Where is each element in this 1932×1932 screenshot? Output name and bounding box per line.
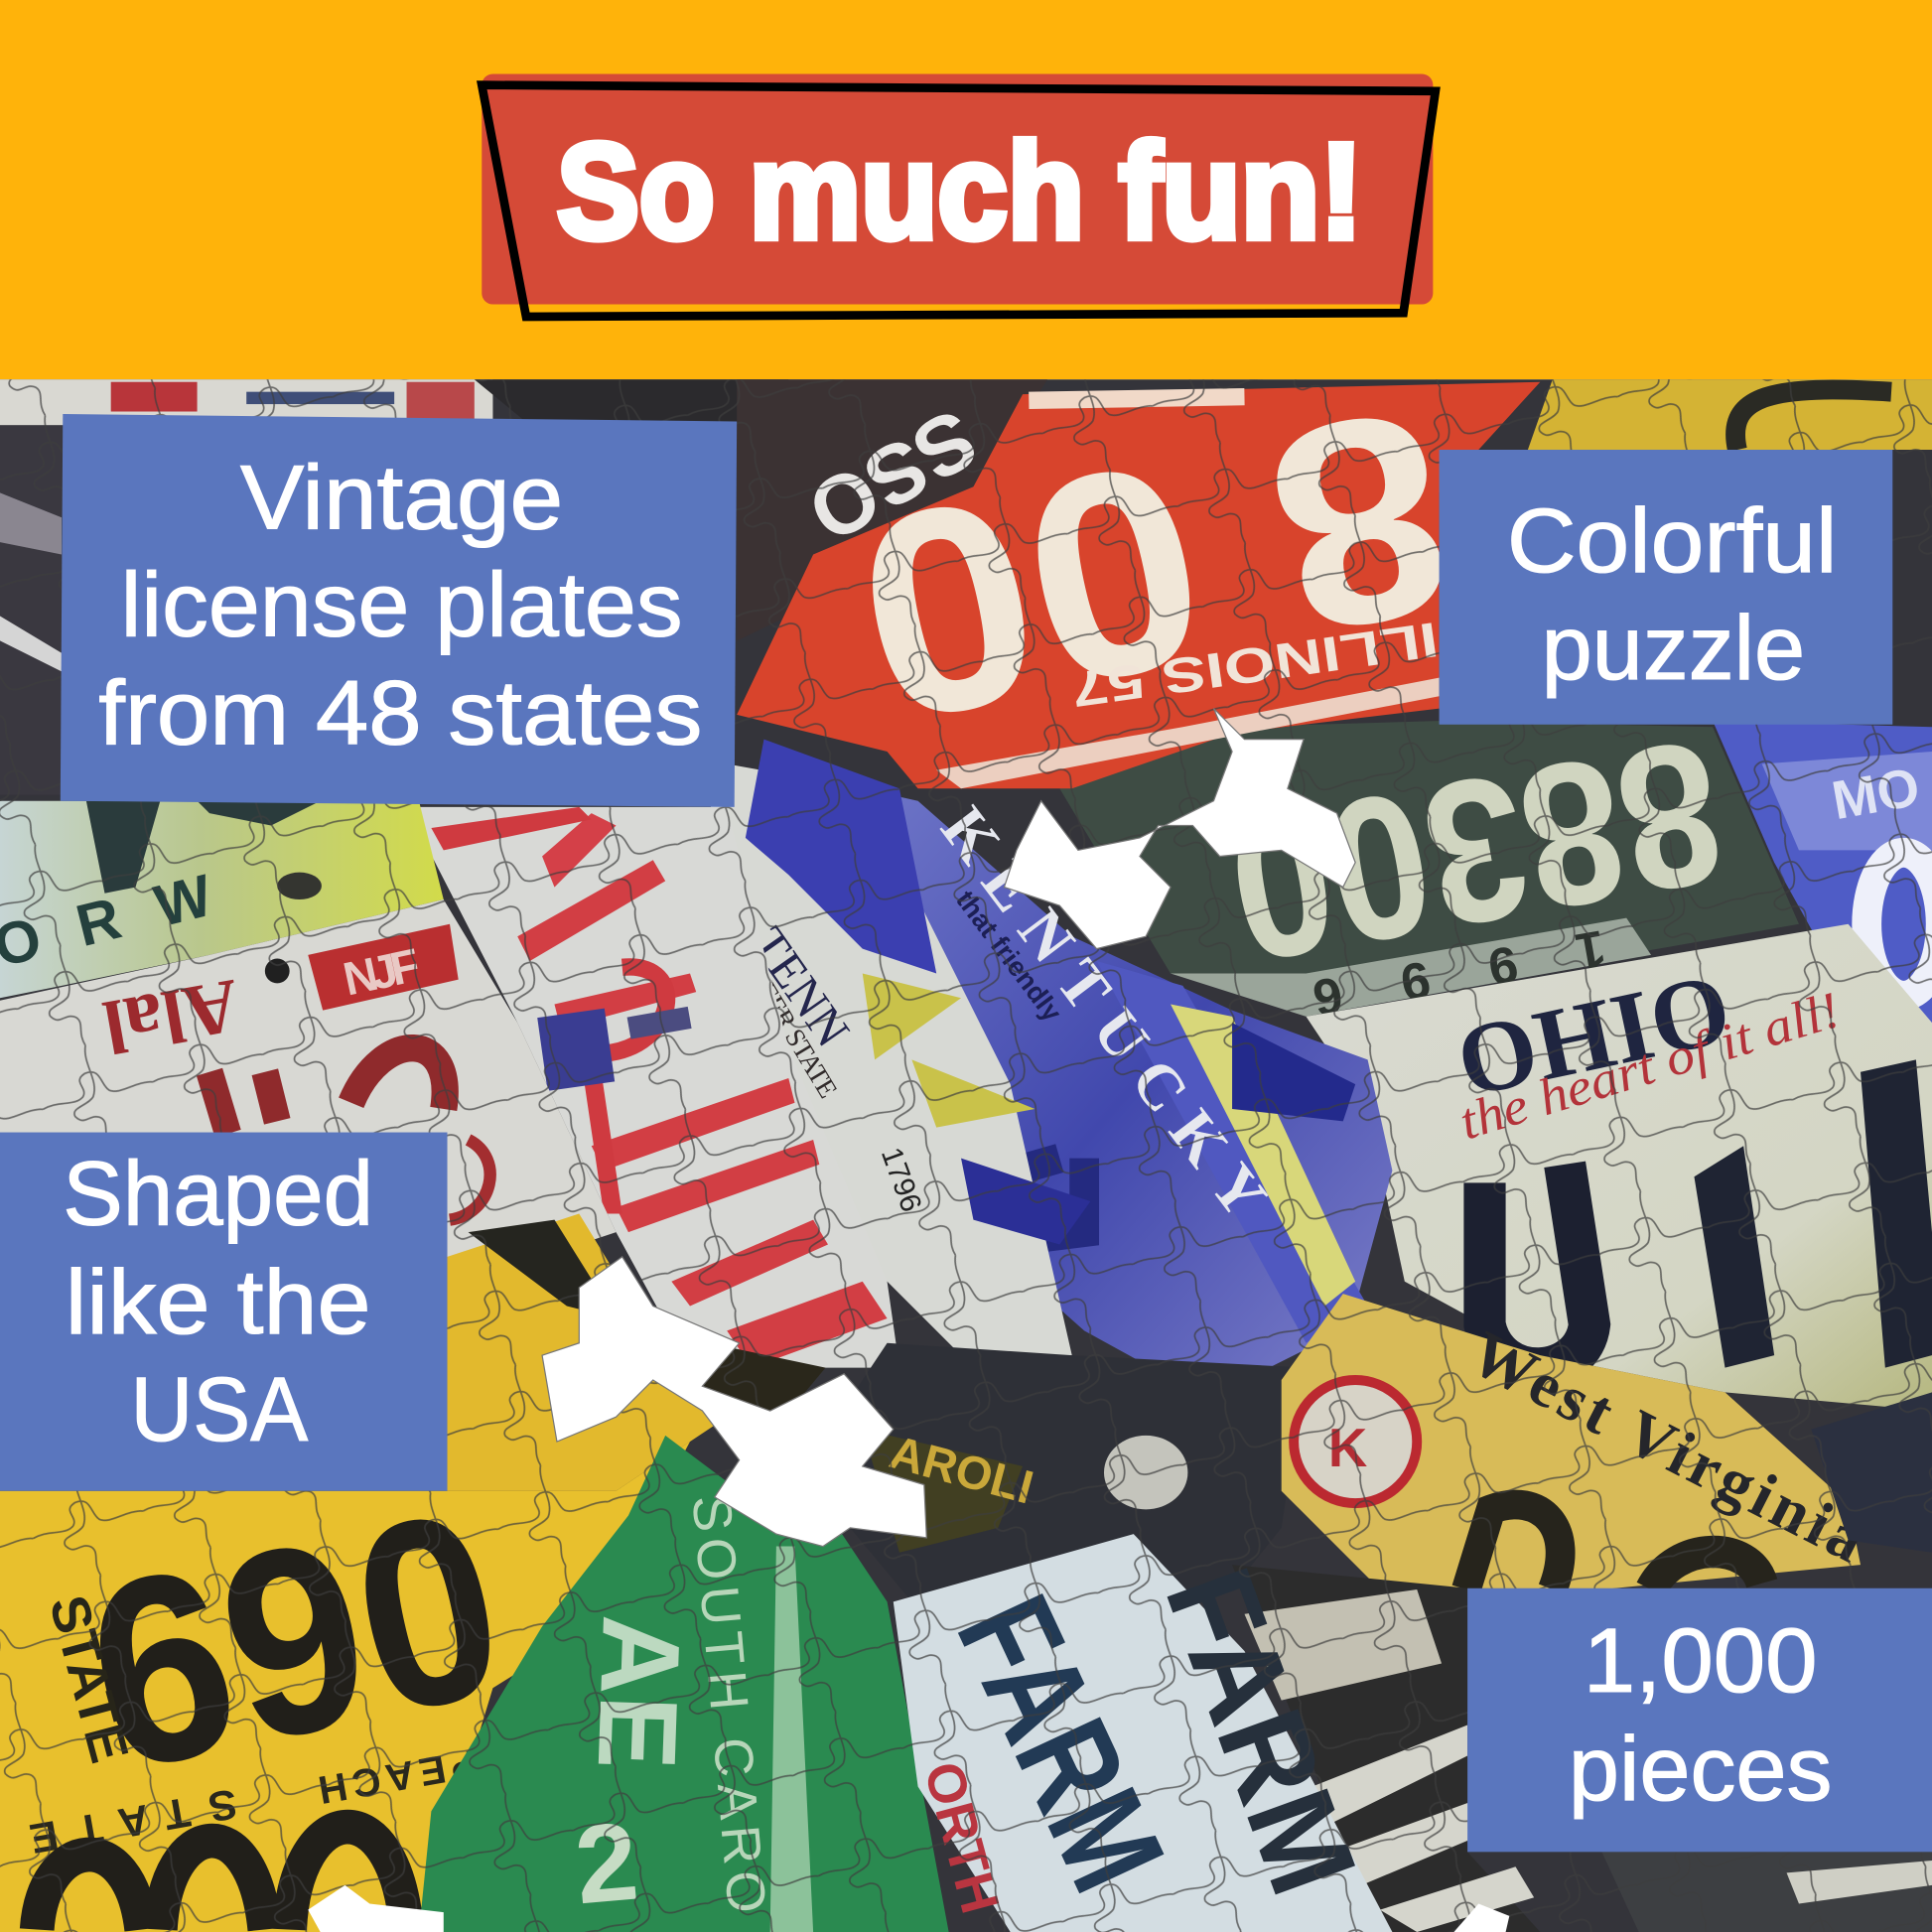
Kentucky plate: that friendly bbox=[950, 885, 1068, 1028]
green plate 1996: 1996 bbox=[1309, 918, 1609, 1027]
red Illinois plate: 8 00 bbox=[832, 346, 1477, 786]
South Carolina green plate: 2 bbox=[571, 1798, 642, 1927]
Farm plate: ORTH bbox=[912, 1755, 1011, 1919]
Ohio plate: OHIO bbox=[1448, 952, 1740, 1119]
lower row of plate digits bbox=[37, 1827, 407, 1930]
callout: shaped like the USA: Shaped bbox=[63, 1144, 373, 1245]
Ohio plate: the heart of it all! bbox=[1453, 982, 1847, 1151]
gap: upper piece pair bbox=[1004, 709, 1355, 949]
right blue plate bbox=[1713, 721, 1932, 1023]
red badge bbox=[308, 924, 459, 1011]
Kentucky plate: KENTUCKY bbox=[928, 793, 1282, 1230]
South Carolina green plate: SOUTH CARO bbox=[681, 1493, 777, 1915]
college emblem: K bbox=[1328, 1418, 1367, 1478]
banner black outline bbox=[482, 85, 1436, 317]
Tennessee plate: TENN bbox=[741, 917, 861, 1056]
right blue plate: MO bbox=[1828, 757, 1924, 831]
callout: shaped like the USA bbox=[0, 1133, 448, 1491]
Kentucky plate bbox=[863, 788, 1392, 1399]
banner red plate bbox=[482, 73, 1433, 305]
dark middle plates bbox=[788, 1343, 1307, 1601]
college emblem bbox=[1294, 1380, 1417, 1503]
red Illinois plate: ILLINOIS 57 bbox=[1068, 612, 1442, 718]
callout: vintage license plates: Vintage bbox=[240, 447, 563, 548]
right edge dark plate bbox=[1811, 1392, 1932, 1553]
callout: colorful puzzle: puzzle bbox=[1542, 598, 1805, 699]
callout: shaped like the USA: like the bbox=[66, 1252, 371, 1353]
lower yellow plate: PEACH bbox=[315, 1740, 481, 1812]
white plate with red letters bbox=[407, 807, 899, 1368]
gap: lower piece pair bbox=[542, 1257, 926, 1547]
callout: vintage license plates: license plates bbox=[121, 554, 683, 655]
top right yellow plate bbox=[1528, 379, 1932, 450]
Farm plate bbox=[894, 1534, 1392, 1932]
top left plates bbox=[0, 379, 788, 794]
title: fun! bbox=[1119, 115, 1363, 267]
bolt hole bbox=[277, 873, 322, 899]
lower yellow plate: 069 bbox=[65, 1454, 524, 1829]
left white plate bbox=[0, 899, 617, 1263]
dark plate with letters: SSO bbox=[793, 391, 993, 560]
Tennessee plate bbox=[690, 740, 1090, 1355]
title: So bbox=[557, 115, 715, 267]
lower yellow plate: STATE bbox=[26, 1780, 240, 1863]
gap: bottom right bbox=[1453, 1903, 1509, 1932]
title banner bbox=[482, 73, 1436, 317]
title: much bbox=[750, 115, 1084, 267]
upper yellow plate bbox=[448, 1213, 826, 1491]
callout: colorful puzzle bbox=[1440, 450, 1892, 725]
Tennessee plate: 1796 bbox=[875, 1144, 927, 1216]
West Virginia plate bbox=[1282, 1294, 1876, 1589]
dark plate with letters bbox=[737, 379, 1047, 640]
capitol building icon bbox=[537, 1007, 692, 1091]
lower yellow plate bbox=[0, 1442, 690, 1932]
callout: 1,000 pieces: 1,000 bbox=[1584, 1610, 1818, 1712]
left white plate: Alal bbox=[97, 963, 246, 1070]
Ohio plate bbox=[1307, 924, 1932, 1411]
Farm plate: FARM bbox=[1139, 1552, 1382, 1911]
green plate 1996: 88300 bbox=[1213, 696, 1738, 1005]
callout: 1,000 pieces: pieces bbox=[1569, 1719, 1832, 1820]
West Virginia plate: West Virginia bbox=[1460, 1316, 1876, 1576]
header band bbox=[0, 0, 1932, 379]
callout: colorful puzzle: Colorful bbox=[1507, 490, 1837, 592]
yellow-green plate bbox=[0, 801, 444, 998]
Tennessee plate: VOLUNTEER STATE bbox=[697, 888, 843, 1103]
red badge: NJF bbox=[339, 938, 424, 1006]
callout: vintage license plates bbox=[61, 414, 737, 807]
callout: shaped like the USA: USA bbox=[131, 1359, 309, 1460]
lower yellow plate: STATE bbox=[38, 1589, 140, 1769]
South Carolina green plate bbox=[419, 1436, 949, 1932]
dark middle plates: AROLI bbox=[885, 1425, 1038, 1514]
callout: vintage license plates: from 48 states bbox=[98, 663, 702, 764]
gap: bottom left bbox=[308, 1885, 444, 1932]
callout: 1,000 pieces bbox=[1467, 1588, 1932, 1852]
striped dark plate bbox=[1232, 1565, 1932, 1932]
missing puzzle piece gaps bbox=[308, 709, 1509, 1932]
South Carolina green plate: AE bbox=[575, 1613, 704, 1771]
